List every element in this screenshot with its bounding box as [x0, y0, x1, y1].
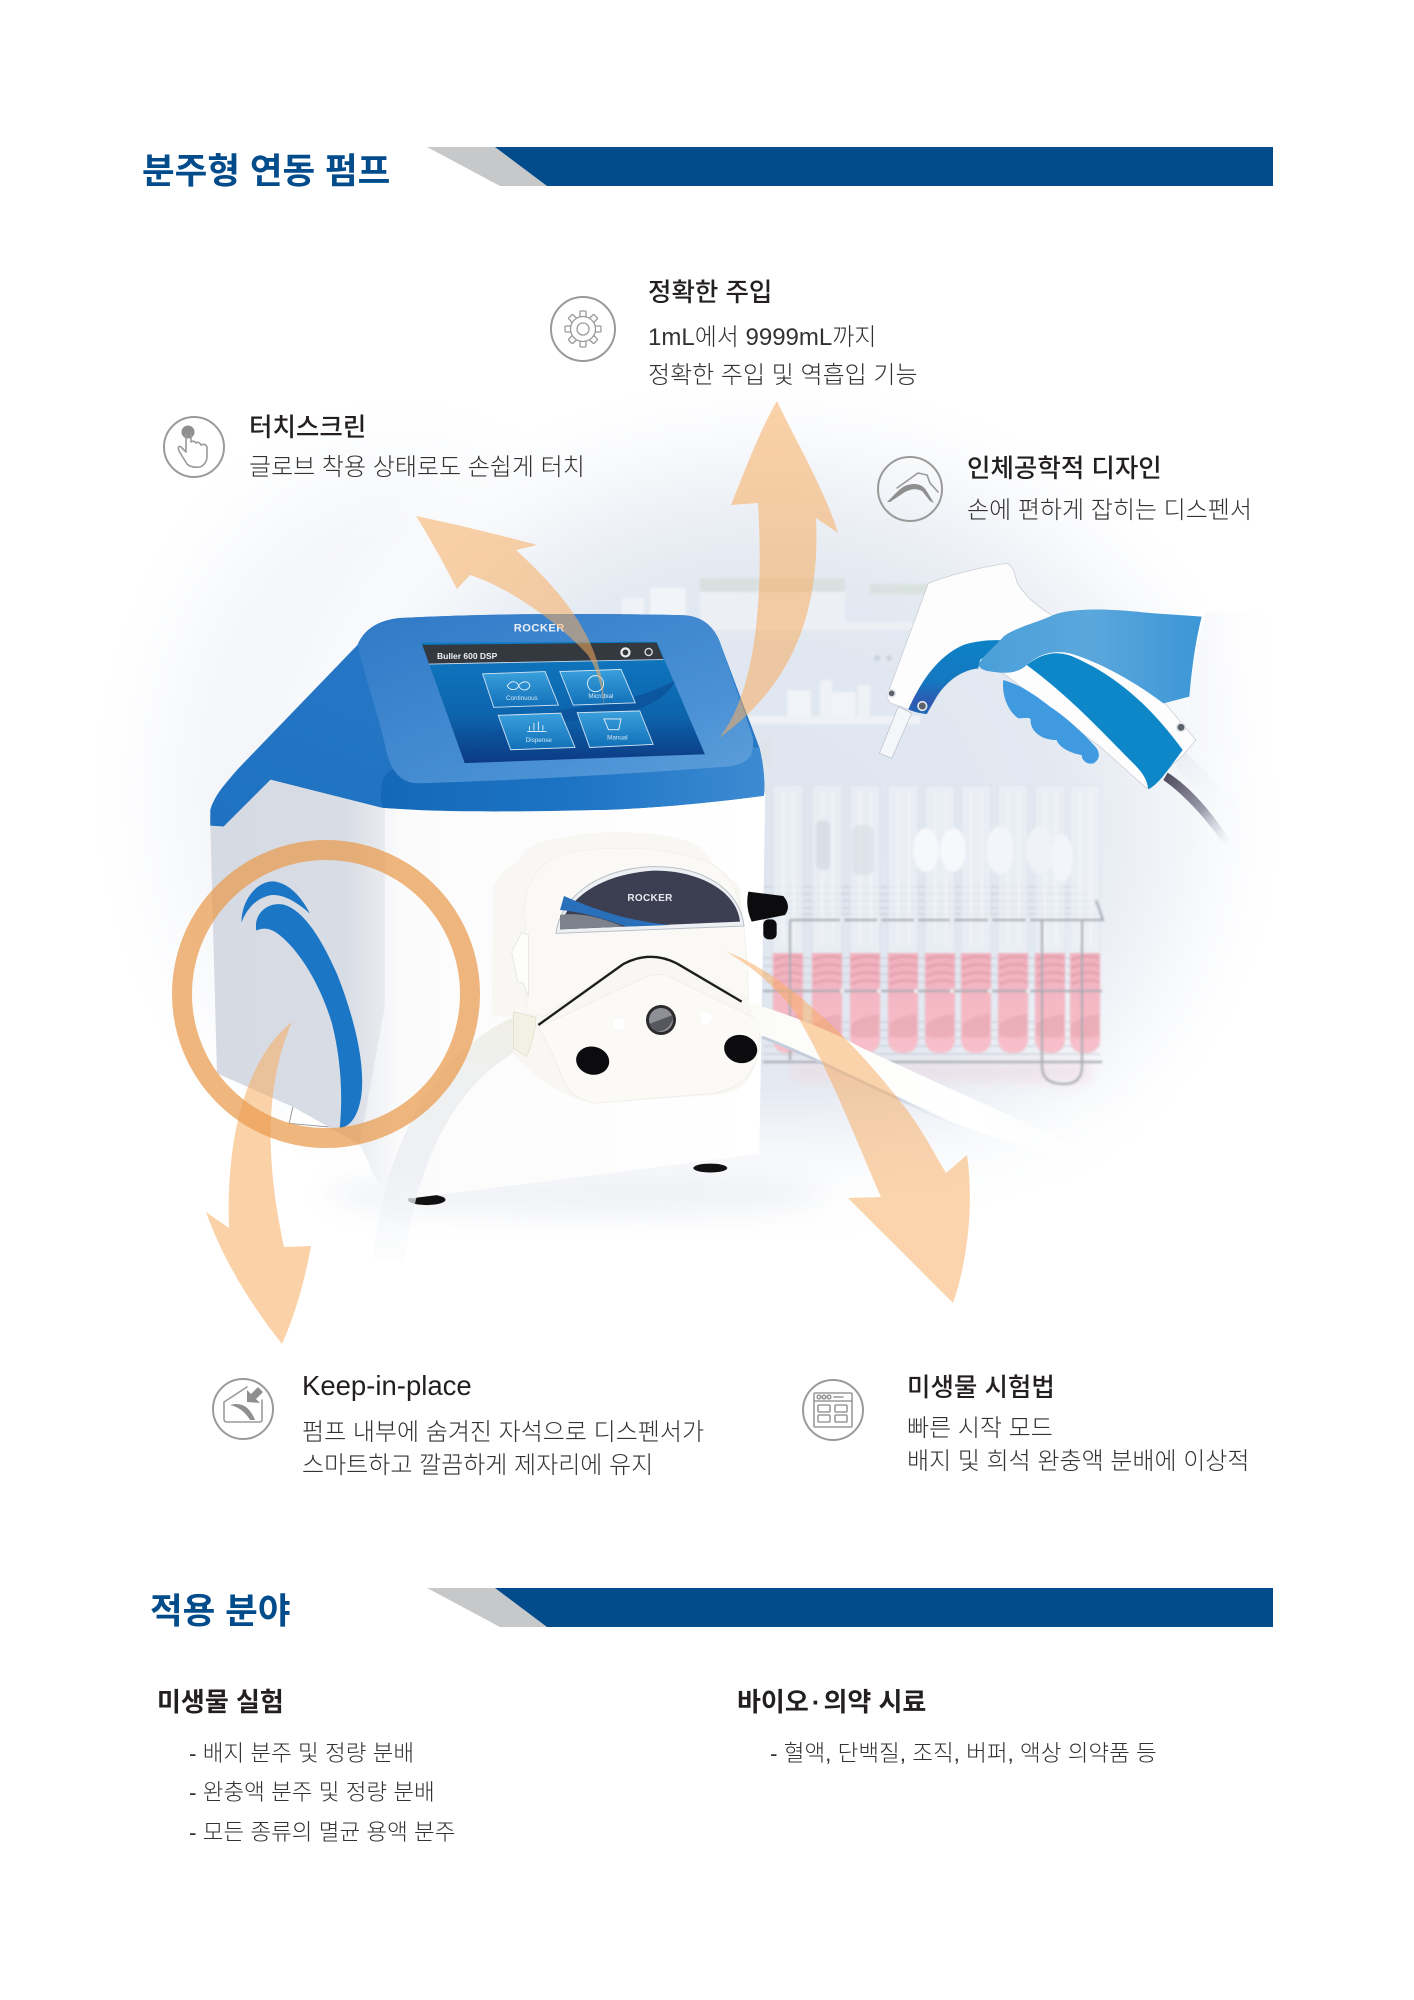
floor shadow [324, 1172, 824, 1216]
section banner: 분주형 연동 펌프 [427, 147, 1273, 186]
wire rack [763, 900, 1103, 1084]
screen button: Microbial [560, 669, 635, 705]
occlusion bed [538, 975, 760, 1103]
dispenser handheld [879, 563, 1287, 843]
tube labels [816, 820, 1073, 882]
heading: 미생물 시험법 [907, 1374, 1055, 1402]
brand mark on cap: ROCKER [514, 622, 565, 634]
pump blue cap [210, 614, 764, 827]
black knob upper [747, 892, 788, 939]
peristaltic pump head [492, 832, 788, 1103]
rack joints [842, 920, 1028, 991]
feature: 정확한 주입 [551, 279, 918, 389]
screen button: Dispense: Dispense [526, 737, 552, 744]
heading: 터치스크린 [249, 414, 366, 442]
feature: Keep-in-place [213, 1370, 704, 1479]
screen button: Dispense [498, 713, 575, 750]
application list: 바이오·의약 시료 [737, 1687, 1157, 1766]
back wire grid [764, 887, 1100, 1054]
list item: - 배지 분주 및 정량 분배 [189, 1741, 414, 1766]
pump left side [210, 780, 385, 1145]
application list: 미생물 실험 [157, 1687, 455, 1845]
heading: 미생물 실험 [157, 1687, 284, 1717]
section banner: 적용 분야 [427, 1588, 1273, 1627]
list item: - 모든 종류의 멸균 용액 분주 [189, 1820, 455, 1845]
head base plate [492, 832, 760, 1103]
pump device [210, 614, 824, 1260]
icon: dispenser [878, 457, 942, 521]
body line: 배지 및 희석 완충액 분배에 이상적 [907, 1448, 1249, 1475]
arrow: to touch screen [416, 516, 604, 705]
feature: 인체공학적 디자인 [878, 455, 1252, 524]
test tubes [773, 785, 1100, 1053]
screen button: Continuous: Continuous [506, 695, 538, 702]
notch [289, 1107, 329, 1127]
silicone tube right [748, 1002, 1130, 1180]
body line: 글로브 착용 상태로도 손쉽게 터치 [249, 454, 585, 481]
black knobs [573, 1032, 760, 1078]
screen button: Manual [577, 711, 653, 748]
pump front [360, 794, 765, 1198]
body line: 정확한 주입 및 역흡입 기능 [648, 362, 918, 389]
body line: 펌프 내부에 숨겨진 자석으로 디스펜서가 [302, 1419, 704, 1446]
icon: window [803, 1380, 863, 1440]
lab coat sleeve [1189, 612, 1287, 763]
glove hand [978, 609, 1202, 703]
dispenser body [887, 563, 1196, 788]
screen button: Microbial: Microbial [588, 693, 613, 700]
list item: - 완충액 분주 및 정량 분배 [189, 1780, 435, 1805]
icon: touch hand [164, 417, 224, 477]
title: 적용 분야: 적용 분야 [150, 1591, 291, 1631]
arrow: to keep-in-place [206, 1022, 311, 1344]
pump window: ROCKER [627, 893, 673, 904]
body line: 1mL에서 9999mL까지 [648, 324, 876, 351]
feature: 미생물 시험법 [803, 1374, 1249, 1475]
list item: - 혈액, 단백질, 조직, 버퍼, 액상 의약품 등 [770, 1741, 1157, 1766]
pump window [556, 867, 744, 933]
background haze [90, 380, 1300, 1310]
latch [512, 932, 528, 997]
pink glow [790, 1062, 1090, 1082]
head cover [525, 848, 748, 1017]
title: 분주형 연동 펌프: 분주형 연동 펌프 [142, 151, 390, 191]
feature: 터치스크린 [164, 414, 585, 481]
side logo [242, 881, 362, 1128]
icon: house arrow [213, 1379, 273, 1439]
body line: 빠른 시작 모드 [907, 1415, 1053, 1442]
tube clamp [513, 1012, 536, 1057]
icon: gear [551, 297, 615, 361]
touch screen: Buller 600 DSP [437, 651, 498, 661]
screws [888, 690, 1185, 732]
blue grip front [908, 640, 1007, 714]
heading: 바이오·의약 시료 [737, 1687, 926, 1717]
heading: Keep-in-place [302, 1370, 472, 1401]
highlight ring [182, 850, 470, 1138]
glove fingers [1003, 680, 1099, 764]
lab shelf background [380, 578, 940, 766]
screen button: Manual: Manual [607, 734, 628, 741]
test tube rack [763, 785, 1103, 1084]
touch screen [421, 642, 705, 763]
silicone tube left [389, 1027, 534, 1260]
body line: 스마트하고 깔끔하게 제자리에 유지 [302, 1452, 653, 1479]
heading: 정확한 주입 [648, 279, 772, 307]
body line: 손에 편하게 잡히는 디스펜서 [967, 497, 1252, 524]
screen button: Continuous [483, 672, 558, 707]
clear tube [1175, 752, 1260, 843]
cord [1163, 773, 1232, 843]
arrow: to precise injection [719, 401, 838, 738]
bed detail [613, 1005, 713, 1035]
pump feet [408, 1164, 727, 1205]
roller tube black line [538, 957, 742, 1025]
arrow: to microbial test [725, 951, 970, 1303]
blue grip rear [1027, 653, 1183, 789]
heading: 인체공학적 디자인 [967, 455, 1162, 483]
nozzle [879, 707, 912, 758]
